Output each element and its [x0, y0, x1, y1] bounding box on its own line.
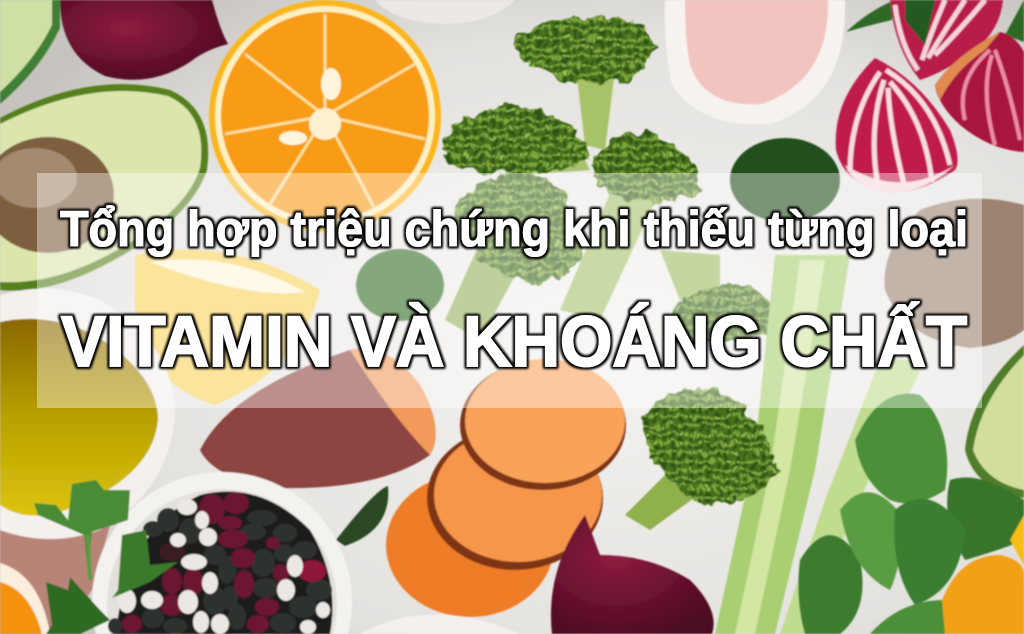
- beans: [108, 492, 332, 634]
- striped beet top: [890, 0, 1003, 80]
- spinach leaves: [798, 393, 1024, 634]
- top bowl: [375, 0, 515, 24]
- orange half: [209, 0, 441, 232]
- sweet potato slices: [386, 359, 626, 617]
- avocado right: [965, 345, 1024, 498]
- title line 2: VITAMIN VÀ KHOÁNG CHẤT: [61, 303, 967, 382]
- broccoli group: [440, 18, 780, 341]
- bean bowl: [92, 472, 352, 634]
- parsley: [34, 480, 178, 634]
- broccoli lower: [625, 388, 777, 530]
- red onion bottom: [551, 515, 714, 634]
- bottom bowl: [360, 614, 520, 634]
- title line 1: Tổng hợp triệu chứng khi thiếu từng loại: [60, 201, 968, 257]
- potato right: [884, 199, 1024, 348]
- pink cloth patch: [0, 525, 110, 634]
- orange bottom right: [942, 515, 1024, 634]
- celery stalks: [715, 255, 925, 634]
- leaves top right: [846, 0, 1024, 42]
- lemon: [135, 250, 320, 405]
- cucumber top left: [0, 0, 60, 104]
- striped beet left: [836, 58, 958, 192]
- translucent title band: [37, 173, 982, 408]
- dark spinach behind broccoli: [356, 138, 840, 321]
- salt bowl: [665, 0, 845, 124]
- sweet potato: [200, 348, 436, 488]
- avocado half: [0, 84, 208, 291]
- small dark herb: [336, 486, 388, 546]
- orange slice bottom left: [0, 563, 50, 634]
- oil bowl: [0, 289, 175, 539]
- striped beet right: [935, 32, 1024, 152]
- red onion top: [60, 0, 228, 80]
